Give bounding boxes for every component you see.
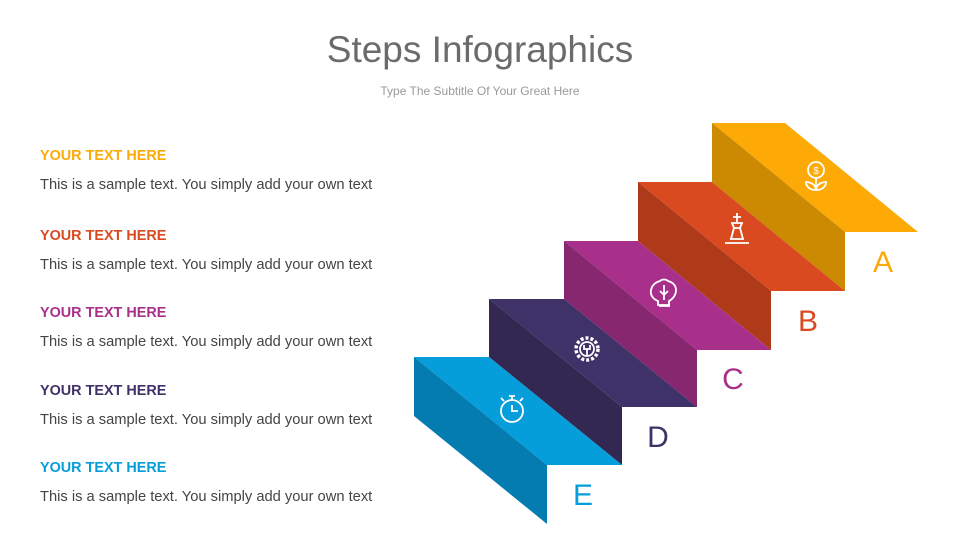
text block B: This is a sample text. You simply add your own text xyxy=(40,257,372,273)
step A xyxy=(712,123,918,291)
icon: stopwatch xyxy=(501,396,523,422)
label B: B xyxy=(798,305,818,338)
label A: A xyxy=(873,246,893,279)
text block A xyxy=(40,148,372,193)
subtitle: Type The Subtitle Of Your Great Here xyxy=(380,84,580,98)
label E: E xyxy=(573,479,593,512)
icon: money plant xyxy=(806,162,826,190)
text block C xyxy=(40,305,372,350)
text block B: YOUR TEXT HERE xyxy=(40,228,166,244)
step D xyxy=(489,299,697,465)
step B xyxy=(638,182,845,350)
text block A: This is a sample text. You simply add your own text xyxy=(40,177,372,193)
text block B xyxy=(40,228,372,273)
step C xyxy=(564,241,771,407)
label C: C xyxy=(722,363,744,396)
text block A: YOUR TEXT HERE xyxy=(40,148,166,164)
label D: D xyxy=(647,421,669,454)
text block C: YOUR TEXT HERE xyxy=(40,305,166,321)
step E xyxy=(414,357,622,524)
text block E xyxy=(40,460,372,505)
text block E: This is a sample text. You simply add your own text xyxy=(40,489,372,505)
text block E: YOUR TEXT HERE xyxy=(40,460,166,476)
icon: money plant: $ xyxy=(813,166,819,177)
text block D: This is a sample text. You simply add your own text xyxy=(40,412,372,428)
icon: brain bulb xyxy=(651,280,676,306)
icon: chess king xyxy=(725,213,749,243)
title: Steps Infographics xyxy=(327,29,633,70)
text block D xyxy=(40,383,372,428)
icon: gear wrench xyxy=(576,338,598,360)
text block D: YOUR TEXT HERE xyxy=(40,383,166,399)
text block C: This is a sample text. You simply add your own text xyxy=(40,334,372,350)
